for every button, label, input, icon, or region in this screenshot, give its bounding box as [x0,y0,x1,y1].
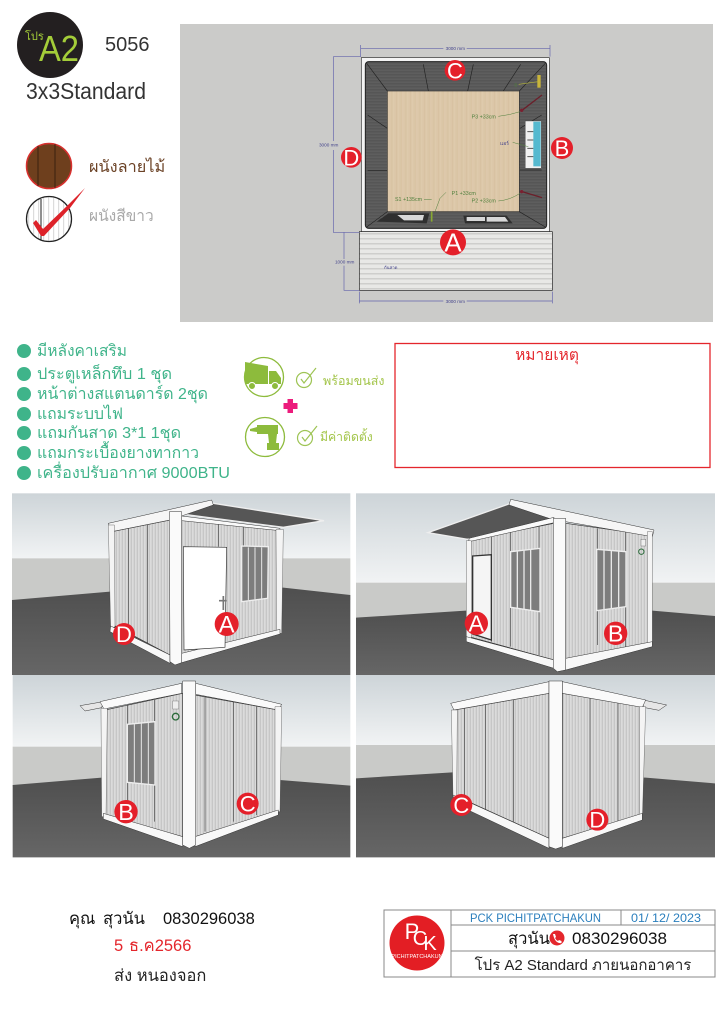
dimension lines [333,45,552,303]
electric conduit [522,95,542,198]
lower window and door [377,213,513,223]
badge: promo A2: A2 [39,28,79,69]
product name: 3x3Standard [26,78,146,104]
swatch: wood wall: ผนังลายไม้ [89,157,165,176]
feature list: หน้าต่างสแตนดาร์ด 2ชุด [37,384,208,404]
title block: 01/ 12/ 2023 [631,911,701,925]
logo PCK [390,916,444,970]
photo: rear view C D [356,675,715,857]
panel: floor plan: แอร์ [500,140,509,147]
panel: floor plan: 1000 mm [335,259,354,264]
label A [465,611,488,637]
swatch: wood wall [26,144,165,188]
panel: floor plan: 3000 mm [446,46,465,51]
check: ready to ship [296,368,316,388]
feature list: แถมระบบไฟ [37,404,123,423]
icon: drill [246,418,284,456]
panel: remarks box: หมายเหตุ [515,347,579,365]
logo PCK: PICHITPATCHAKUN [391,954,443,960]
feature list: มีหลังคาเสริม [37,342,127,360]
labels A B C D: C [447,58,463,83]
label B: B [118,799,134,825]
annotations: S1 +135cm [395,197,423,203]
label C: C [240,792,256,817]
label B [114,799,138,825]
logo PCK: C [413,928,427,950]
labels A B C D: D [343,145,359,170]
outer frame [361,58,549,232]
label B: B [608,621,623,647]
feature list [17,342,230,482]
label C: C [453,793,469,818]
labels A B C D [341,58,573,258]
feature list: เครื่องปรับอากาศ 9000BTU [37,461,230,482]
interior walls [365,62,547,228]
annotations: P1 +33cm [452,191,476,197]
feature list: ประตูเหล็กทึบ 1 ชุด [37,363,172,384]
customer contact [69,910,255,929]
title block: 0830296038 [572,929,667,948]
product code: 5056 [105,34,150,56]
text: installation fee: มีค่าติดตั้ง [320,428,373,444]
labels A B C D: A [444,228,462,258]
feature list: แถมกระเบื้องยางทากาว [37,441,199,462]
wood floor [387,91,519,212]
customer contact: คุณ [69,910,95,929]
icon: delivery truck [244,358,284,396]
labels A B C D: B [555,136,569,161]
label D: D [589,808,605,833]
label B [604,621,627,647]
title block: PCK PICHITPATCHAKUN [470,911,601,925]
photo: side view A B [356,493,715,675]
delivery date: ธ.ค2566 [129,937,191,955]
badge: promo A2 [17,12,83,78]
panel: floor plan: กันสาด [384,265,398,270]
annotations: P2 +33cm [472,199,496,205]
title block: โปร A2 Standard ภายนอกอาคาร [475,956,691,974]
logo PCK: K [423,933,437,955]
delivery location: ส่ง หนองจอก [114,967,206,985]
check: installation fee [298,426,317,446]
panel: floor plan: 3000 mm [319,143,338,148]
annotations: B [514,83,517,88]
customer contact: 0830296038 [163,910,255,928]
icon: phone [550,930,564,946]
canopy front panel [359,232,552,290]
annotations: P3 +33cm [472,114,496,120]
customer contact: สุวนัน [103,910,145,929]
label A: A [219,612,235,639]
annotations [395,83,517,205]
logo PCK: P [405,919,419,944]
feature list: แถมกันสาด 3*1 1ชุด [37,425,181,443]
label D: D [116,622,132,647]
window on side B [525,121,541,168]
panel: remarks box [395,344,710,468]
swatch: white wall selected: ผนังสีขาว [89,208,154,225]
title block [384,910,715,977]
title block: สุวนัน [508,930,550,949]
icon: plus [284,399,298,413]
panel: floor plan [180,24,713,322]
text: ready to ship: พร้อมขนส่ง [323,374,385,388]
swatch: white wall selected [26,188,154,242]
label A [215,612,239,639]
delivery date: 5 [114,937,123,955]
panel: floor plan: 3000 mm [446,299,465,304]
photo: front view A D [12,493,350,675]
label A: A [469,611,485,637]
photo: back view B C [13,675,350,857]
badge: promo A2: โปร [25,29,44,43]
